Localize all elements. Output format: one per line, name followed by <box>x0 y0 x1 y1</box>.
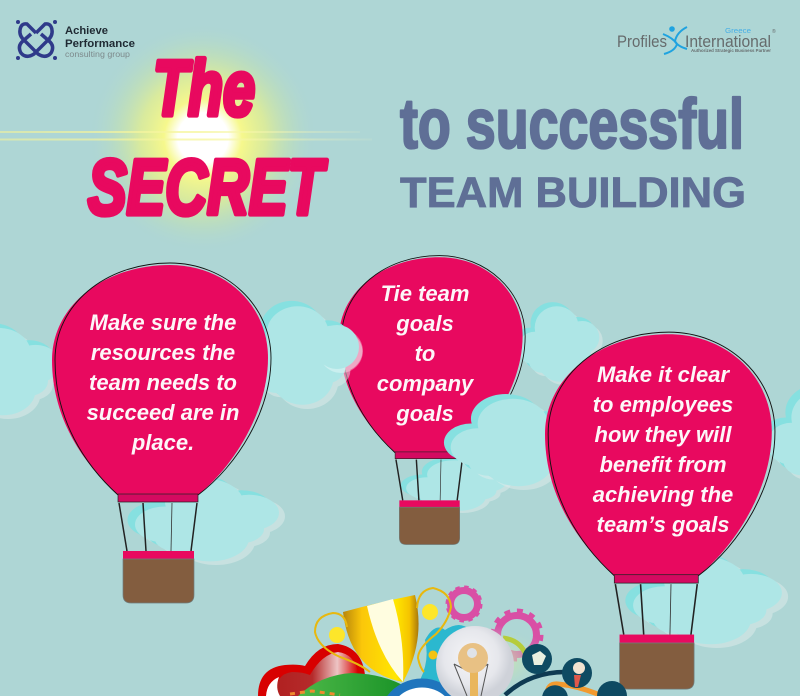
text: goal 1: resources the <box>91 340 235 365</box>
balloon art <box>339 256 525 545</box>
text: goal 2: goals <box>395 401 454 426</box>
blue ring <box>387 678 457 696</box>
logo text: Performance <box>65 38 135 50</box>
gear: small <box>447 587 481 621</box>
logo: Profiles International: Authorized Strategic Business Partner <box>691 48 771 53</box>
title: The SECRET <box>88 45 327 231</box>
trophy <box>315 588 451 682</box>
title: The SECRET: SECRET <box>88 144 327 231</box>
text: goal 1: Make sure the <box>90 310 236 335</box>
logo text: consulting group <box>65 49 130 59</box>
wire <box>454 664 488 696</box>
heart <box>258 644 365 696</box>
node: person 1 <box>522 644 552 674</box>
cloud: under right balloon <box>625 552 788 648</box>
node: person 2 <box>562 658 592 688</box>
text: goal 2: goals <box>395 311 454 336</box>
key <box>458 643 488 696</box>
logo: Profiles International: Greece <box>725 26 751 35</box>
illustration: trophy, bulb and gears <box>258 587 627 696</box>
title: The SECRET: The <box>153 45 255 132</box>
node: person 4 <box>542 685 568 696</box>
cloud: right of middle balloon <box>513 302 603 385</box>
text: goal 1: team needs to <box>89 370 237 395</box>
heading: to successful: to successful <box>400 85 744 164</box>
cloud: right edge <box>761 385 800 491</box>
logo text <box>65 25 135 59</box>
text: goal 2: Tie team <box>381 281 469 306</box>
teal splat <box>412 625 480 690</box>
balloon: right <box>545 332 775 689</box>
light bulb <box>436 626 514 696</box>
green dome <box>298 673 412 696</box>
node: person 3 <box>597 681 627 696</box>
gear: large <box>492 610 542 660</box>
orange connector <box>547 684 600 695</box>
balloon art <box>52 263 271 603</box>
text: goal 3: benefit from <box>599 452 727 477</box>
text: goal 3: how they will <box>595 422 732 447</box>
cloud: under left balloon <box>128 474 285 565</box>
text: goal 2: to <box>415 341 435 366</box>
sun glow <box>0 23 372 253</box>
connector line <box>505 672 565 695</box>
text: goal 2: company <box>377 371 475 396</box>
logo: Profiles International: Profiles <box>617 32 667 51</box>
logo text: Achieve <box>65 25 108 37</box>
cloud: under middle balloon <box>401 457 511 513</box>
text: goal 3: team’s goals <box>597 512 729 537</box>
text: goal 3: Make it clear <box>597 362 730 387</box>
logo: Profiles International: International <box>685 32 771 51</box>
balloon art <box>545 332 775 689</box>
balloon: middle <box>339 256 525 545</box>
text: goal 1: succeed are in <box>87 400 239 425</box>
logo: Achieve Performance <box>16 20 135 60</box>
balloon: left <box>52 263 271 603</box>
heading: TEAM BUILDING: TEAM BUILDING <box>400 169 746 217</box>
text: goal 3: achieving the <box>593 482 733 507</box>
cloud: over middle balloon left <box>236 301 363 409</box>
orange dashes <box>290 691 340 695</box>
logo: Profiles International: ® <box>772 28 776 35</box>
pale halo <box>430 625 550 696</box>
icon: leaping figure <box>663 26 687 54</box>
logo: Profiles International <box>617 26 776 54</box>
green arc <box>503 638 526 655</box>
text: goal 3: to employees <box>593 392 733 417</box>
cloud: over middle balloon right <box>444 394 586 490</box>
text: goal 1: place. <box>131 430 194 455</box>
icon: interlocked knot <box>16 20 57 60</box>
cloud: far left <box>0 323 66 419</box>
